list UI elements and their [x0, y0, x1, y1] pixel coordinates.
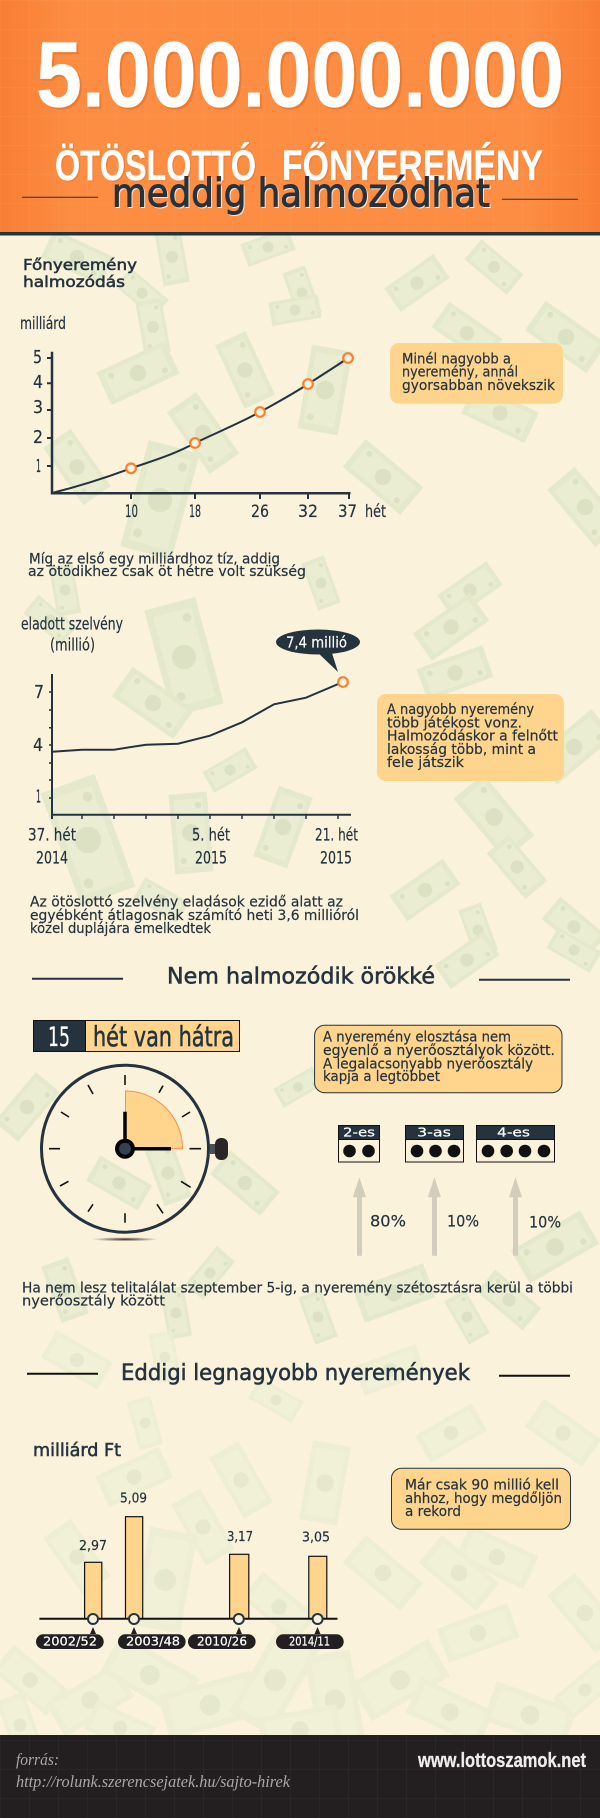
speech bubble: peak value	[276, 630, 360, 672]
callout: prize distribution: A nyeremény elosztása nem	[323, 1030, 511, 1046]
prize tier: 3-as: 3-as	[417, 1126, 451, 1140]
line chart: tickets sold: (millió)	[50, 636, 95, 656]
arrow: 10 percent	[509, 1177, 561, 1256]
callout: bigger jackpot attracts players: A nagyobb nyeremény	[387, 702, 534, 718]
text block: september deadline	[22, 1280, 573, 1310]
prize tier: 2-es	[338, 1126, 380, 1162]
section heading: jackpot accumulation	[23, 256, 137, 291]
callout: bigger jackpot attracts players: Halmozódáskor a felnőtt	[387, 729, 559, 745]
callout: 90 million to record: Már csak 90 millió kell	[405, 1477, 559, 1493]
text block: first billion vs fifth	[28, 551, 306, 580]
footer: http://rolunk.szerencsejatek.hu/sajto-hirek	[16, 1772, 290, 1791]
line chart: tickets sold: 21. hét	[315, 826, 358, 846]
date pills: 2010/26	[197, 1634, 247, 1648]
line chart: jackpot by week: 4	[33, 372, 43, 393]
arrow: 80 percent: 80%	[370, 1212, 406, 1231]
title: subject	[55, 141, 543, 190]
bar chart: biggest wins: 3,05	[302, 1531, 330, 1546]
line chart: jackpot by week: 5	[33, 347, 42, 368]
bar chart: biggest wins	[33, 1440, 344, 1649]
line chart: jackpot by week: 32	[298, 502, 318, 522]
date pills: 2002/52	[43, 1634, 97, 1648]
bar chart: biggest wins: 2,97	[79, 1539, 107, 1554]
callout: bigger jackpot attracts players: több játékost vonz.	[387, 715, 522, 731]
text block: september deadline: Ha nem lesz telitalálat szeptember 5-ig, a nyeremény szétosztásra kerül a többi	[22, 1280, 573, 1296]
title: subject: ÖTÖSLOTTÓ	[55, 141, 256, 190]
arrow: 10 percent: 10%	[529, 1212, 561, 1231]
bar chart: biggest wins: 3,17	[227, 1530, 253, 1545]
y axis title: eladott szelvény	[21, 614, 123, 634]
line chart: jackpot by week: 3	[33, 397, 43, 418]
line chart: tickets sold: 1	[36, 787, 41, 808]
y axis title: milliárd	[20, 314, 66, 334]
footer	[0, 1735, 600, 1818]
badge: 15 weeks left	[34, 1020, 240, 1053]
date pills: 2003/48	[126, 1634, 180, 1648]
speech bubble: peak value: 7,4 millió	[286, 634, 347, 652]
bar chart: biggest wins: 5,09	[120, 1492, 147, 1507]
heading: biggest wins: Eddigi legnagyobb nyeremények	[121, 1361, 470, 1386]
callout: prize distribution: kapja a legtöbbet	[323, 1069, 440, 1085]
header banner	[0, 0, 600, 236]
callout: prize distribution	[315, 1025, 562, 1093]
heading: not forever: Nem halmozódik örökké	[167, 964, 435, 989]
callout: 90 million to record: a rekord	[405, 1504, 461, 1520]
line chart: jackpot by week: hét	[365, 502, 386, 522]
source: forrás:	[16, 1750, 59, 1769]
callout: bigger jackpot grows faster: Minél nagyobb a	[402, 351, 511, 367]
line chart: jackpot by week: 1	[36, 456, 41, 477]
line chart: jackpot by week: 18	[189, 502, 201, 522]
line chart: jackpot by week	[20, 314, 386, 522]
icon: clock	[42, 1065, 228, 1241]
line chart: tickets sold	[21, 614, 360, 868]
badge: 15 weeks left: 15	[48, 1022, 70, 1053]
prize tier: 2-es: 2-es	[343, 1126, 375, 1140]
date pills	[36, 1627, 344, 1649]
y axis title: milliárd Ft	[33, 1440, 121, 1461]
text block: first billion vs fifth: az ötödikhez csak öt hétre volt szükség	[28, 564, 306, 580]
line chart: jackpot by week: 2	[33, 427, 43, 448]
text block: first billion vs fifth: Míg az első egy milliárdhoz tíz, addig	[29, 551, 280, 567]
badge: 15 weeks left: hét van hátra	[93, 1020, 234, 1053]
line chart: tickets sold: 2015	[320, 848, 352, 868]
callout: bigger jackpot grows faster	[390, 343, 563, 404]
text block: september deadline: nyerőosztály között	[22, 1294, 166, 1310]
line chart: jackpot by week: 37	[338, 502, 357, 522]
line chart: tickets sold: 2014	[36, 848, 68, 868]
text block: ticket sales: közel duplájára emelkedtek	[30, 921, 212, 937]
title: script subtitle: meddig halmozódhat	[112, 172, 490, 217]
prize tier: 3-as	[406, 1126, 464, 1162]
text block: ticket sales: Az ötöslottó szelvény eladások ezidő alatt az	[30, 895, 343, 911]
arrow: 10 percent: 10%	[447, 1212, 479, 1231]
line chart: jackpot by week: 10	[125, 502, 138, 522]
callout: bigger jackpot attracts players: lakosság több, mint a	[387, 742, 536, 758]
arrow: 80 percent	[353, 1177, 406, 1256]
callout: prize distribution: egyenlő a nyerőosztályok között.	[323, 1043, 555, 1059]
line chart: tickets sold: 4	[33, 735, 43, 756]
callout: bigger jackpot grows faster: nyeremény, annál	[402, 365, 518, 381]
arrow: 10 percent	[428, 1177, 479, 1256]
line chart: tickets sold: 37. hét	[28, 826, 76, 846]
callout: 90 million to record	[392, 1468, 570, 1529]
line chart: jackpot by week: 26	[251, 502, 269, 522]
line chart: tickets sold: 2015	[195, 848, 227, 868]
callout: bigger jackpot attracts players	[377, 694, 564, 781]
prize tier: 4-es	[476, 1126, 554, 1162]
text block: ticket sales	[30, 895, 359, 937]
callout: bigger jackpot grows faster: gyorsabban növekszik	[402, 378, 556, 394]
section heading: jackpot accumulation: halmozódás	[23, 273, 125, 291]
callout: 90 million to record: ahhoz, hogy megdőljön	[405, 1491, 562, 1507]
date pills: 2014/11	[289, 1634, 330, 1648]
prize tier: 4-es: 4-es	[497, 1126, 530, 1140]
callout: bigger jackpot attracts players: fele játszik	[387, 755, 465, 771]
line chart: tickets sold: 7	[34, 682, 44, 703]
callout: prize distribution: A legalacsonyabb nyerőosztály	[323, 1056, 533, 1072]
text block: ticket sales: egyébként átlagosnak számító heti 3,6 millióról	[30, 908, 359, 924]
section heading: jackpot accumulation: Főnyeremény	[23, 256, 137, 274]
line chart: tickets sold: 5. hét	[192, 826, 230, 846]
